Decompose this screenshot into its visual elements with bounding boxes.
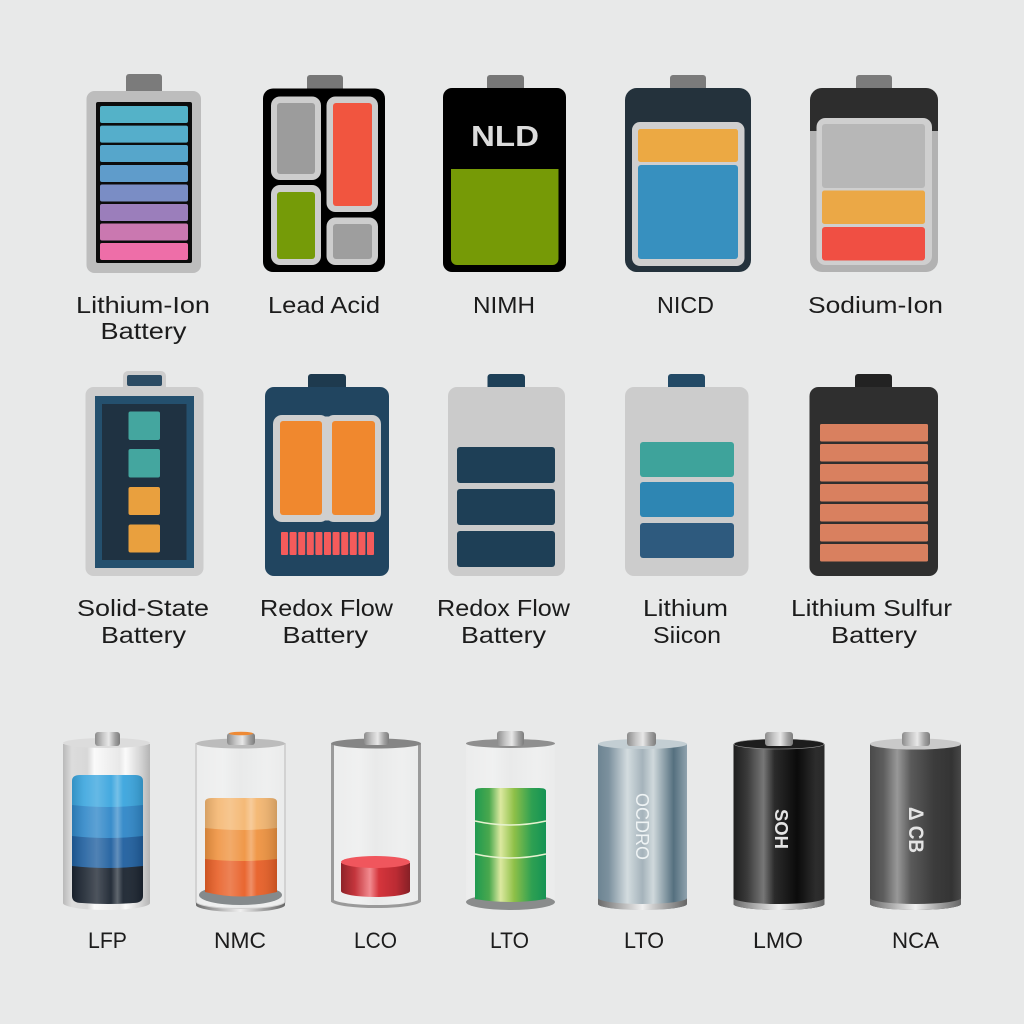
battery: Redox Flow (orange) [265,374,389,576]
battery: Lithium-Ion [86,74,201,273]
label: Lithium Siicon [643,595,728,648]
label: Redox Flow Battery: Battery [282,622,369,648]
label: LMO: LMO [753,928,803,953]
cylinder: NCA [870,732,961,910]
label: LFP: LFP [88,928,127,953]
label: Lithium-Ion Battery: Lithium-Ion [76,292,210,318]
label: Lithium Sulfur Battery [791,595,952,648]
label: Redox Flow Battery [260,595,393,648]
cylinder: LCO [331,732,421,907]
label: NMC: NMC [214,928,266,953]
label: Lithium Sulfur Battery: Lithium Sulfur [791,595,952,621]
label: NIMH: NIMH [473,292,535,318]
label: Lithium Sulfur Battery: Battery [831,622,918,648]
rotated marking: Δ CB [904,807,927,853]
label: Solid-State Battery [77,595,209,648]
label: Lithium Siicon: Lithium [643,595,728,621]
label: NCA: NCA [892,928,939,953]
label: NICD: NICD [657,292,714,318]
cylinder: LTO green [466,731,555,910]
label: Lithium Siicon: Siicon [653,622,721,648]
label: LTO (second): LTO [624,928,664,953]
battery marking: NLD: NLD [471,121,539,153]
label: Redox Flow Battery (second): Battery [461,622,547,648]
rotated marking: SOH [771,809,792,849]
label: Redox Flow Battery: Redox Flow [260,595,393,621]
cylinder: NMC [196,732,285,912]
battery: NICD [625,75,751,272]
cylinder: LMO [734,732,825,910]
red cell strip [281,532,374,555]
label: Solid-State Battery: Solid-State [77,595,209,621]
battery: Lead Acid [263,75,385,272]
cylinder: LFP [63,732,150,910]
battery: Lithium Sulfur [810,374,938,576]
label: Lithium-Ion Battery [76,292,210,344]
cylinder: LTO steel [598,732,687,910]
rotated marking: OCDRO [632,793,653,860]
label: Redox Flow Battery (second) [437,595,570,648]
label: Lithium-Ion Battery: Battery [100,318,187,344]
label: Redox Flow Battery (second): Redox Flow [437,595,570,621]
battery: NIMH [443,75,566,272]
battery: Sodium-Ion [810,75,938,272]
label: Sodium-Ion: Sodium-Ion [808,292,943,318]
battery: Lithium Silicon [625,374,748,576]
label: LTO: LTO [490,928,529,953]
battery: Redox Flow (navy) [448,374,565,576]
label: LCO: LCO [354,928,397,953]
battery: Solid-State [86,371,204,576]
label: Solid-State Battery: Battery [101,622,187,648]
label: Lead Acid: Lead Acid [268,292,380,318]
